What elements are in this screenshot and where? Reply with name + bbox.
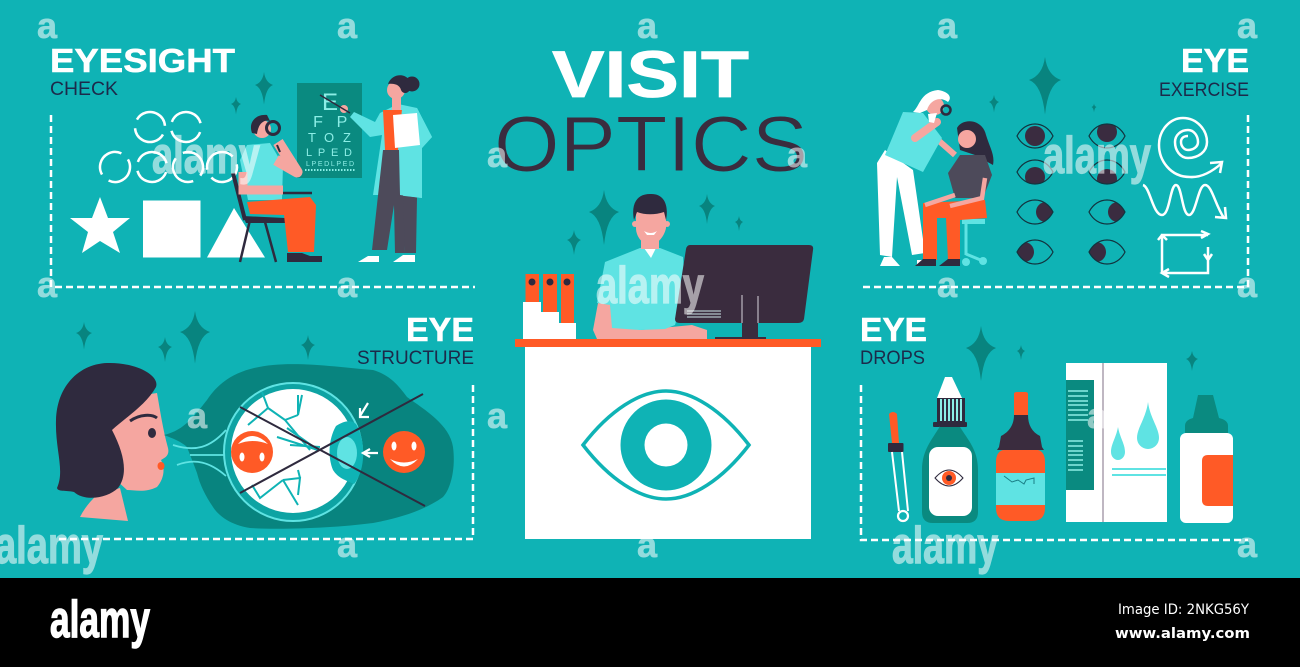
stock watermarks: a [637,524,658,565]
panel: eye drops [860,311,1248,540]
title [494,37,808,188]
icon: wave arrow [1143,185,1226,218]
title: OPTICS [494,99,808,188]
eye chart: Z [343,130,351,145]
bottle with eye label [922,377,978,523]
icon: square arrows [1158,231,1212,277]
smiley [383,431,425,473]
title: VISIT [552,37,749,111]
person: doctor examining [877,90,955,266]
person: head profile [56,363,168,521]
panel: eye exercise [860,42,1249,287]
heading: eye exercise: EYE [1181,42,1249,79]
stock watermarks: a [187,395,208,436]
heading: eyesight check [50,42,235,100]
stock watermarks: alamy [596,257,704,315]
eye chart: T [308,130,316,145]
heading: eye drops: EYE [860,311,927,348]
panel: eye structure [55,311,474,539]
binders [523,274,576,339]
heading: eyesight check: CHECK [50,79,118,100]
stock watermarks: a [337,5,358,46]
panel: eyesight check [50,42,475,287]
eye chart: O [324,130,334,145]
eye movement icons [1014,122,1128,264]
arrows [360,403,378,457]
stock watermarks: a [337,264,358,305]
footer logo: alamy [50,591,150,649]
heading: eyesight check: EYESIGHT [50,42,235,79]
stock watermarks: a [487,134,508,175]
stock watermarks: a [37,264,58,305]
white bottle [1180,395,1233,523]
eye chart [297,83,362,178]
eye chart: LPED [306,147,352,159]
heading: eye drops: DROPS [860,348,925,369]
eye chart: E [322,89,338,116]
vision test rings [95,107,239,187]
orange dropper bottle [996,392,1045,521]
stock watermarks: a [337,524,358,565]
panel: front desk with receptionist [515,194,821,539]
stock watermarks: a [637,5,658,46]
stock watermarks: a [1087,395,1108,436]
stock watermarks: alamy [892,517,998,575]
icon: eye emblem [583,391,749,499]
footer bar [0,578,1300,667]
stock watermarks: a [37,5,58,46]
stock watermarks: a [1237,5,1258,46]
heading: eye structure: STRUCTURE [357,348,474,369]
medicine box [1066,363,1167,522]
person: seated patient [233,115,322,262]
stock watermarks: a [787,134,808,175]
heading: eye exercise [1159,42,1249,101]
eye chart: LPEDLPED [306,161,354,168]
stock watermarks: a [1237,264,1258,305]
heading: eye structure: EYE [406,311,474,348]
desk [515,339,821,539]
diagram: eye cross-section [164,364,454,529]
stock watermarks: alamy [1043,127,1151,185]
stock watermarks: a [1237,524,1258,565]
triangle shape [207,208,265,258]
footer image details: Image ID: 2NKG56Y [1118,602,1249,618]
star shape [70,197,130,253]
heading: eye exercise: EXERCISE [1159,80,1249,101]
stock watermarks: alamy [152,127,260,185]
heading: eye structure [357,311,474,369]
footer image details: www.alamy.com [1115,626,1250,642]
heading: eye drops [860,311,927,369]
stock watermarks: a [937,264,958,305]
eye chart: P [337,114,347,131]
person: receptionist [593,194,707,339]
computer monitor [675,245,813,339]
person: seated patient [915,121,993,266]
footer image details [1115,602,1250,642]
inverted smiley [231,431,273,473]
decorative sparkle stars [76,57,1198,381]
square shape [143,200,200,258]
icon: spiral arrow [1159,118,1222,177]
stock watermarks: a [937,5,958,46]
stock watermarks: a [487,395,508,436]
eye chart: F [313,114,323,131]
pipette [888,412,908,521]
person: doctor with pointer [320,75,432,262]
